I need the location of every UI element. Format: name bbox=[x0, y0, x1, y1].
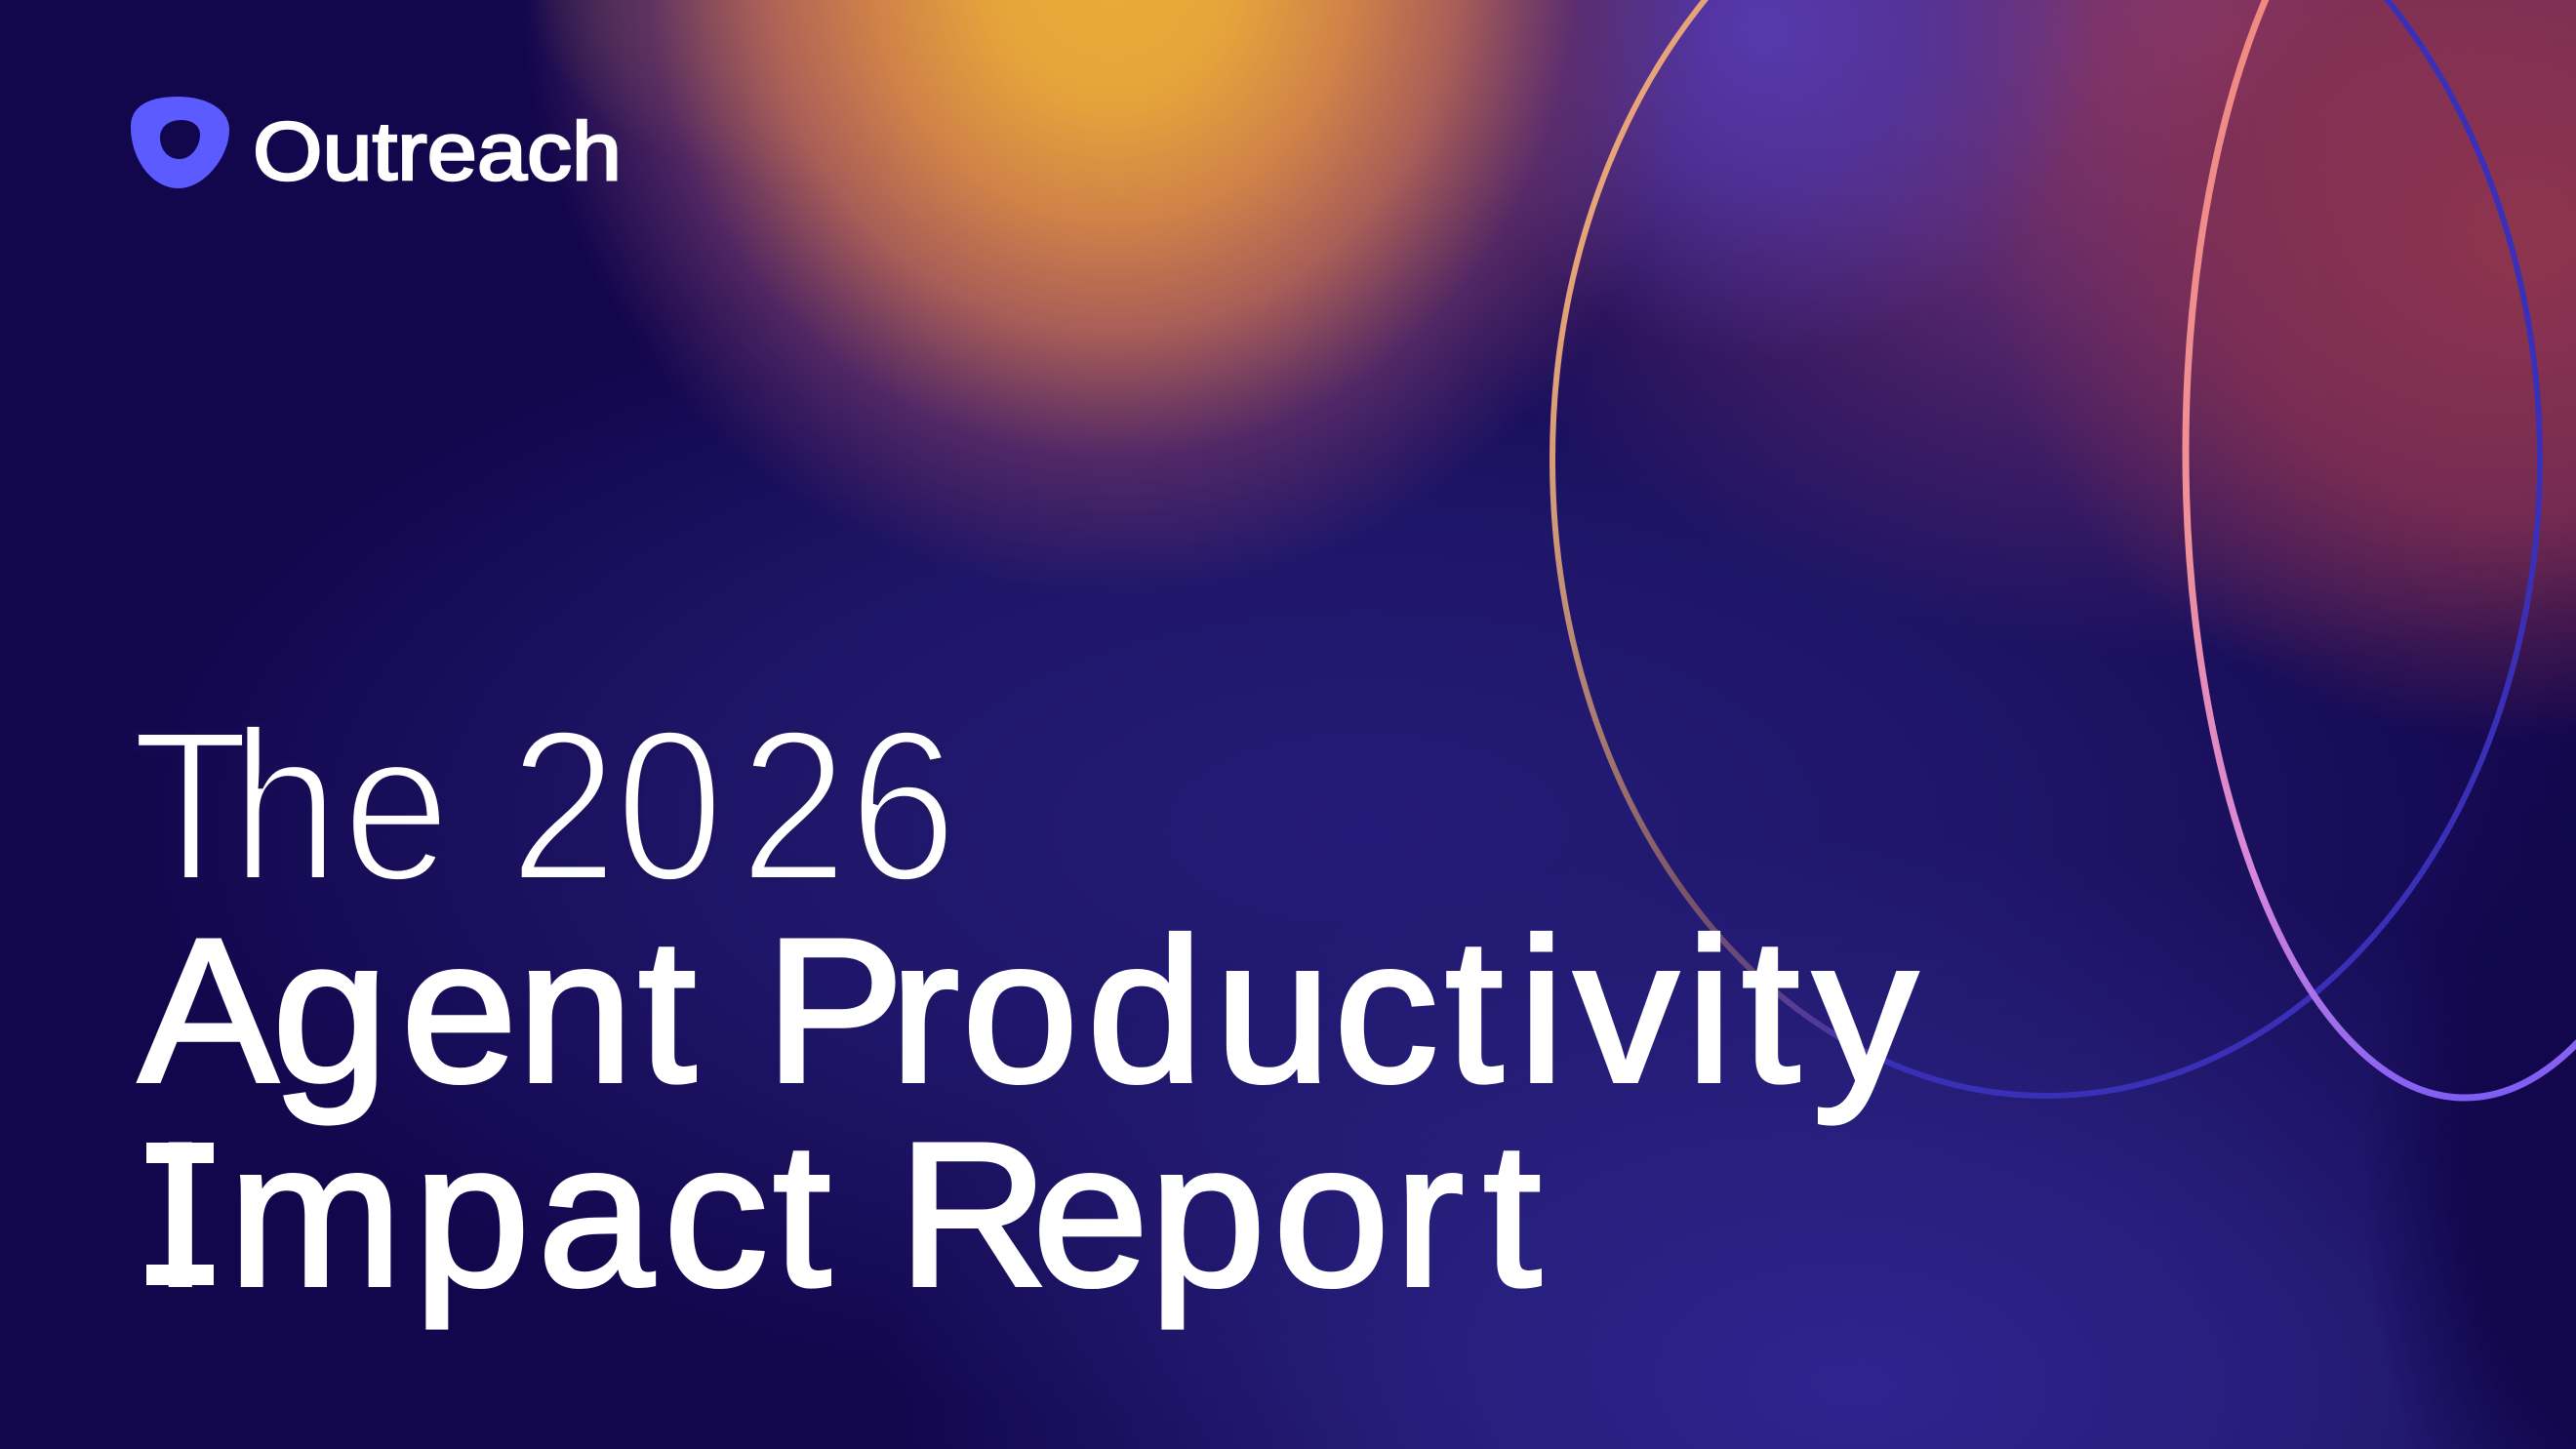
wordmark: Outreach bbox=[253, 105, 622, 197]
icon: Outreach mark bbox=[131, 97, 229, 188]
title line: The 2026: The 2026 bbox=[132, 685, 957, 926]
title line: Agent Productivity: Agent Productivity bbox=[139, 896, 1917, 1125]
ring: right ellipse bbox=[2186, 0, 2576, 1098]
title bbox=[132, 685, 1917, 1329]
logo bbox=[131, 97, 622, 197]
ring: large ellipse bbox=[1552, 0, 2540, 1096]
title line: Impact Report: Impact Report bbox=[151, 1100, 1542, 1329]
